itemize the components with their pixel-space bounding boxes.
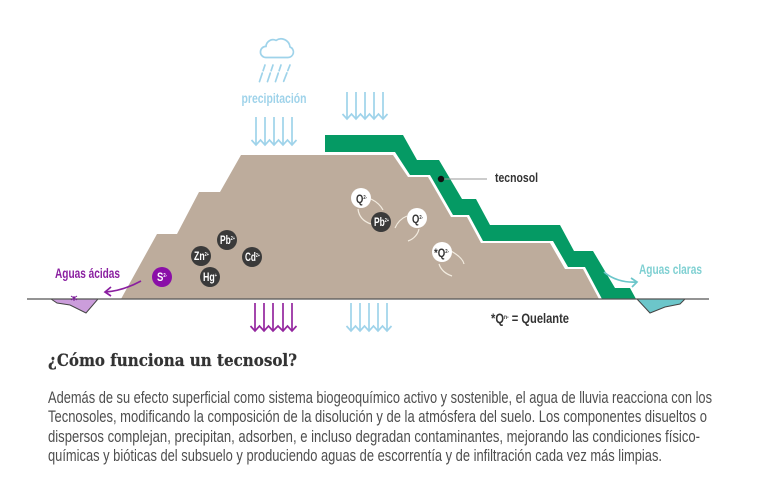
chelate: free Q: [395, 208, 427, 241]
chelate: asterisk Q: [432, 242, 464, 276]
ion: Cd: 2+: [256, 253, 260, 259]
ion: Cd: [242, 247, 262, 267]
ground line: [27, 298, 709, 300]
arrows: clean infiltration: [346, 303, 392, 331]
arrows: rain over mound: [252, 117, 296, 145]
ion: Pb: 2+: [231, 236, 235, 242]
ion: Hg: Hg: [203, 272, 218, 284]
icon: rain cloud: [259, 39, 293, 83]
ion: Zn: Zn: [194, 251, 208, 263]
ion: Pb: Pb: [220, 235, 235, 247]
clear water pond: [637, 299, 685, 313]
label: Aguas claras: Aguas claras: [639, 262, 702, 277]
chelate: Q bound to Pb: 2-: [363, 195, 367, 201]
ion: Pb: [217, 230, 237, 250]
precipitation label: precipitación: [242, 91, 306, 106]
ion: S: [152, 267, 172, 287]
legend: Quelante: *Q: [491, 311, 507, 326]
chelate: Q bound to Pb: [351, 188, 391, 232]
legend: Quelante: = Quelante: [509, 311, 569, 326]
ion: Cd: Cd: [245, 252, 260, 264]
soil mound: [121, 155, 599, 299]
chelate: Q bound to Pb: 2+: [385, 218, 389, 224]
chelate: free Q: Q: [412, 214, 421, 226]
legend: Quelante: n-: [504, 315, 509, 321]
ion: Hg: +: [215, 273, 217, 279]
chelate: asterisk Q: 2-: [445, 249, 449, 255]
ion: S: S: [157, 272, 165, 284]
ion: Zn: [191, 246, 211, 266]
chelate: Q bound to Pb: Q: [356, 194, 365, 206]
label: Aguas ácidas: Aguas ácidas: [55, 266, 120, 281]
chelate: free Q: 2-: [419, 215, 423, 221]
arrows: rain over tecnosol: [342, 92, 388, 119]
title: ¿Cómo funciona un tecnosol?: [48, 351, 297, 371]
body text: [48, 388, 712, 465]
tecnosol callout: tecnosol: [495, 170, 538, 185]
tecnosol callout: [438, 170, 538, 185]
ion: Zn: 2+: [205, 252, 209, 258]
arrows: acid infiltration: [250, 303, 296, 331]
icon: small mark in acid pond: [71, 296, 77, 301]
ion: S: 2-: [163, 273, 167, 279]
arrow: clear water: [604, 272, 637, 287]
acid water pond: [51, 299, 98, 313]
arrow: acid water: [105, 281, 141, 296]
chelate: Q bound to Pb: Pb: [374, 217, 389, 229]
chelate: asterisk Q: *Q: [434, 248, 447, 260]
tecnosol green layer: [325, 135, 636, 299]
ion: Hg: [200, 267, 220, 287]
